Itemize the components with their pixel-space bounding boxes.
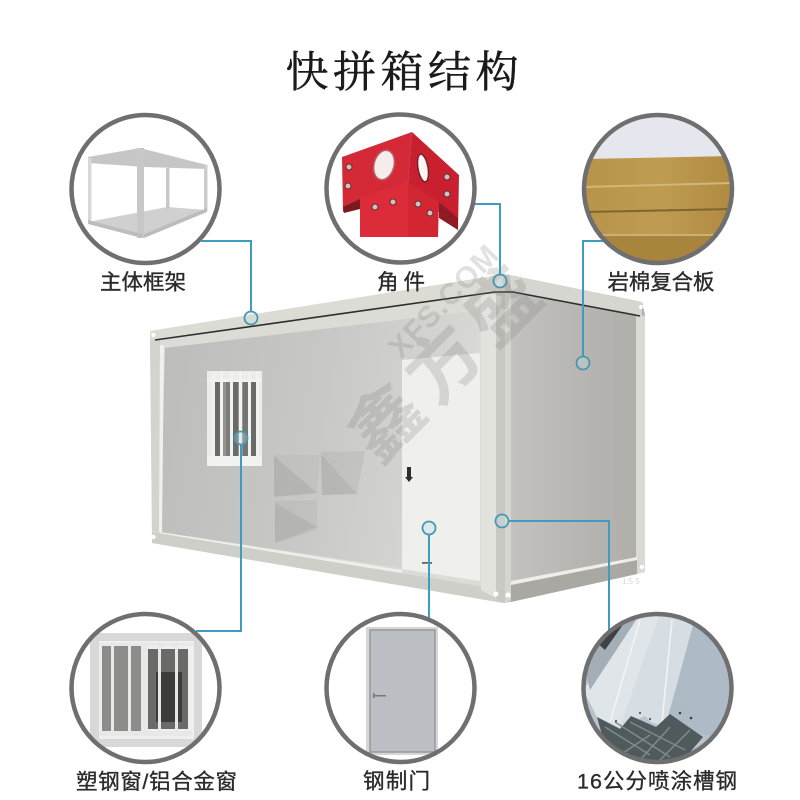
watermark: grey logo: [274, 451, 365, 543]
ring: [326, 614, 474, 762]
connector: channel steel: [496, 514, 609, 630]
roof seam: [155, 292, 640, 340]
door: [402, 353, 480, 581]
panel: main frame: [70, 114, 258, 324]
ring: [584, 614, 732, 762]
ventilation slit marks: 1:5 5: [622, 577, 640, 586]
ring: [326, 114, 474, 262]
ring: [72, 115, 220, 263]
image: red corner piece: [342, 132, 459, 237]
panel: corner fitting: [325, 113, 506, 294]
image: channel steel: [583, 614, 733, 764]
label: 16公分喷涂槽钢: [577, 770, 737, 794]
ring: [72, 614, 220, 762]
label: 钢制门: [363, 770, 430, 794]
label: 角 件: [377, 270, 425, 294]
panel: painted channel steel: [496, 514, 737, 794]
panel: rock wool composite board: [576, 115, 732, 370]
image: rock wool layers: [584, 115, 732, 263]
container illustration: [150, 274, 645, 603]
front face of container: [150, 274, 512, 603]
ring: [584, 115, 732, 263]
label: 塑钢窗/铝合金窗: [76, 770, 237, 794]
watermark: brand text: XFS.COM: [382, 238, 506, 365]
label: 主体框架: [100, 270, 186, 294]
image: door: [366, 627, 438, 755]
connector: frame: [201, 241, 258, 324]
title: 快拼箱结构: [286, 50, 518, 97]
connector: window: [196, 432, 248, 631]
window: [207, 371, 262, 466]
connector: rock wool: [576, 241, 604, 370]
connector: door: [422, 522, 436, 620]
panel: window: [70, 432, 248, 794]
panel: steel door: [326, 522, 476, 794]
connector: corner: [474, 204, 506, 288]
label: 岩棉复合板: [608, 270, 714, 294]
image: steel frame: [88, 148, 208, 238]
side face of container: [494, 274, 645, 603]
image: window: [90, 633, 202, 747]
watermark: brand text: 鑫方盛: [333, 253, 557, 477]
